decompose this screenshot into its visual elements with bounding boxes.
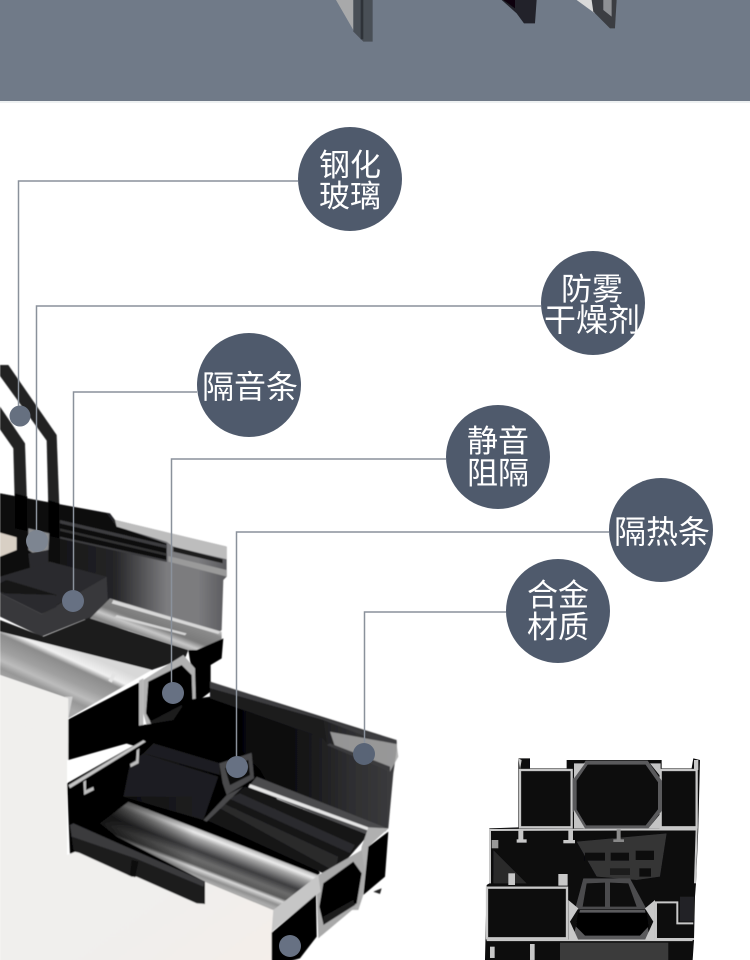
lower assembly (0, 682, 398, 960)
callout: tempered glass: 玻璃 (319, 179, 381, 214)
callout: silencing barrier (162, 405, 550, 704)
callout: tempered glass: 钢化 (319, 148, 381, 183)
callout: tempered glass (10, 127, 402, 426)
right black block (188, 638, 223, 703)
upper back wall (0, 493, 227, 648)
lower octagon chamber (317, 850, 365, 938)
top silver surface (0, 632, 152, 718)
desiccant filler (0, 533, 17, 557)
black seal band (0, 493, 167, 562)
callout: acoustic strip (62, 333, 301, 612)
callout: alloy material (353, 559, 610, 765)
callout: acoustic strip: 隔音条 (202, 369, 298, 405)
floor silver ledge (100, 802, 318, 910)
callout: silencing barrier: 阻隔 (467, 456, 529, 491)
grey band on wall foot (248, 777, 385, 836)
top silver strip (115, 520, 227, 559)
bottom row (487, 940, 693, 960)
upper opening (68, 683, 139, 760)
black sealing strip (70, 823, 205, 904)
thermal break strip (123, 743, 254, 822)
front ledge and opening (272, 875, 321, 932)
cavity black (67, 733, 320, 910)
callout: silencing barrier: 静音 (467, 424, 529, 459)
upper rail (68, 740, 146, 788)
upper profile (0, 365, 227, 648)
callout: alloy material: 合金 (527, 578, 589, 613)
lower right chamber (350, 827, 388, 910)
trapezoid thermal chamber (575, 878, 647, 909)
window profile fragments (336, 0, 617, 42)
callout: thermal break strip: 隔热条 (614, 514, 710, 550)
glass bead strips (0, 365, 59, 513)
middle section (0, 598, 223, 760)
section outline (485, 758, 700, 960)
lower chambers (487, 888, 694, 940)
upper silver ledge (90, 598, 222, 650)
dark floor (0, 618, 188, 670)
profile cross-section (485, 758, 700, 960)
white outer face (0, 718, 273, 960)
callout: anti-fog desiccant: 干燥剂 (544, 302, 640, 338)
top band (0, 0, 750, 103)
callout: anti-fog desiccant (26, 251, 645, 552)
lower back wall (93, 682, 397, 832)
callout: thermal break strip (226, 478, 713, 778)
callout: alloy material: 材质 (527, 610, 589, 645)
acoustic seal block (0, 562, 108, 637)
aluminium profile cutaway illustration (0, 365, 398, 960)
middle cavity with gasket (490, 829, 697, 886)
upper chambers (518, 758, 698, 828)
dark rib channel (207, 787, 368, 873)
marker dot: lower frame (279, 935, 301, 957)
white outer face (0, 675, 68, 760)
callout: anti-fog desiccant: 防雾 (561, 272, 623, 307)
upper octagon chamber (143, 655, 196, 748)
